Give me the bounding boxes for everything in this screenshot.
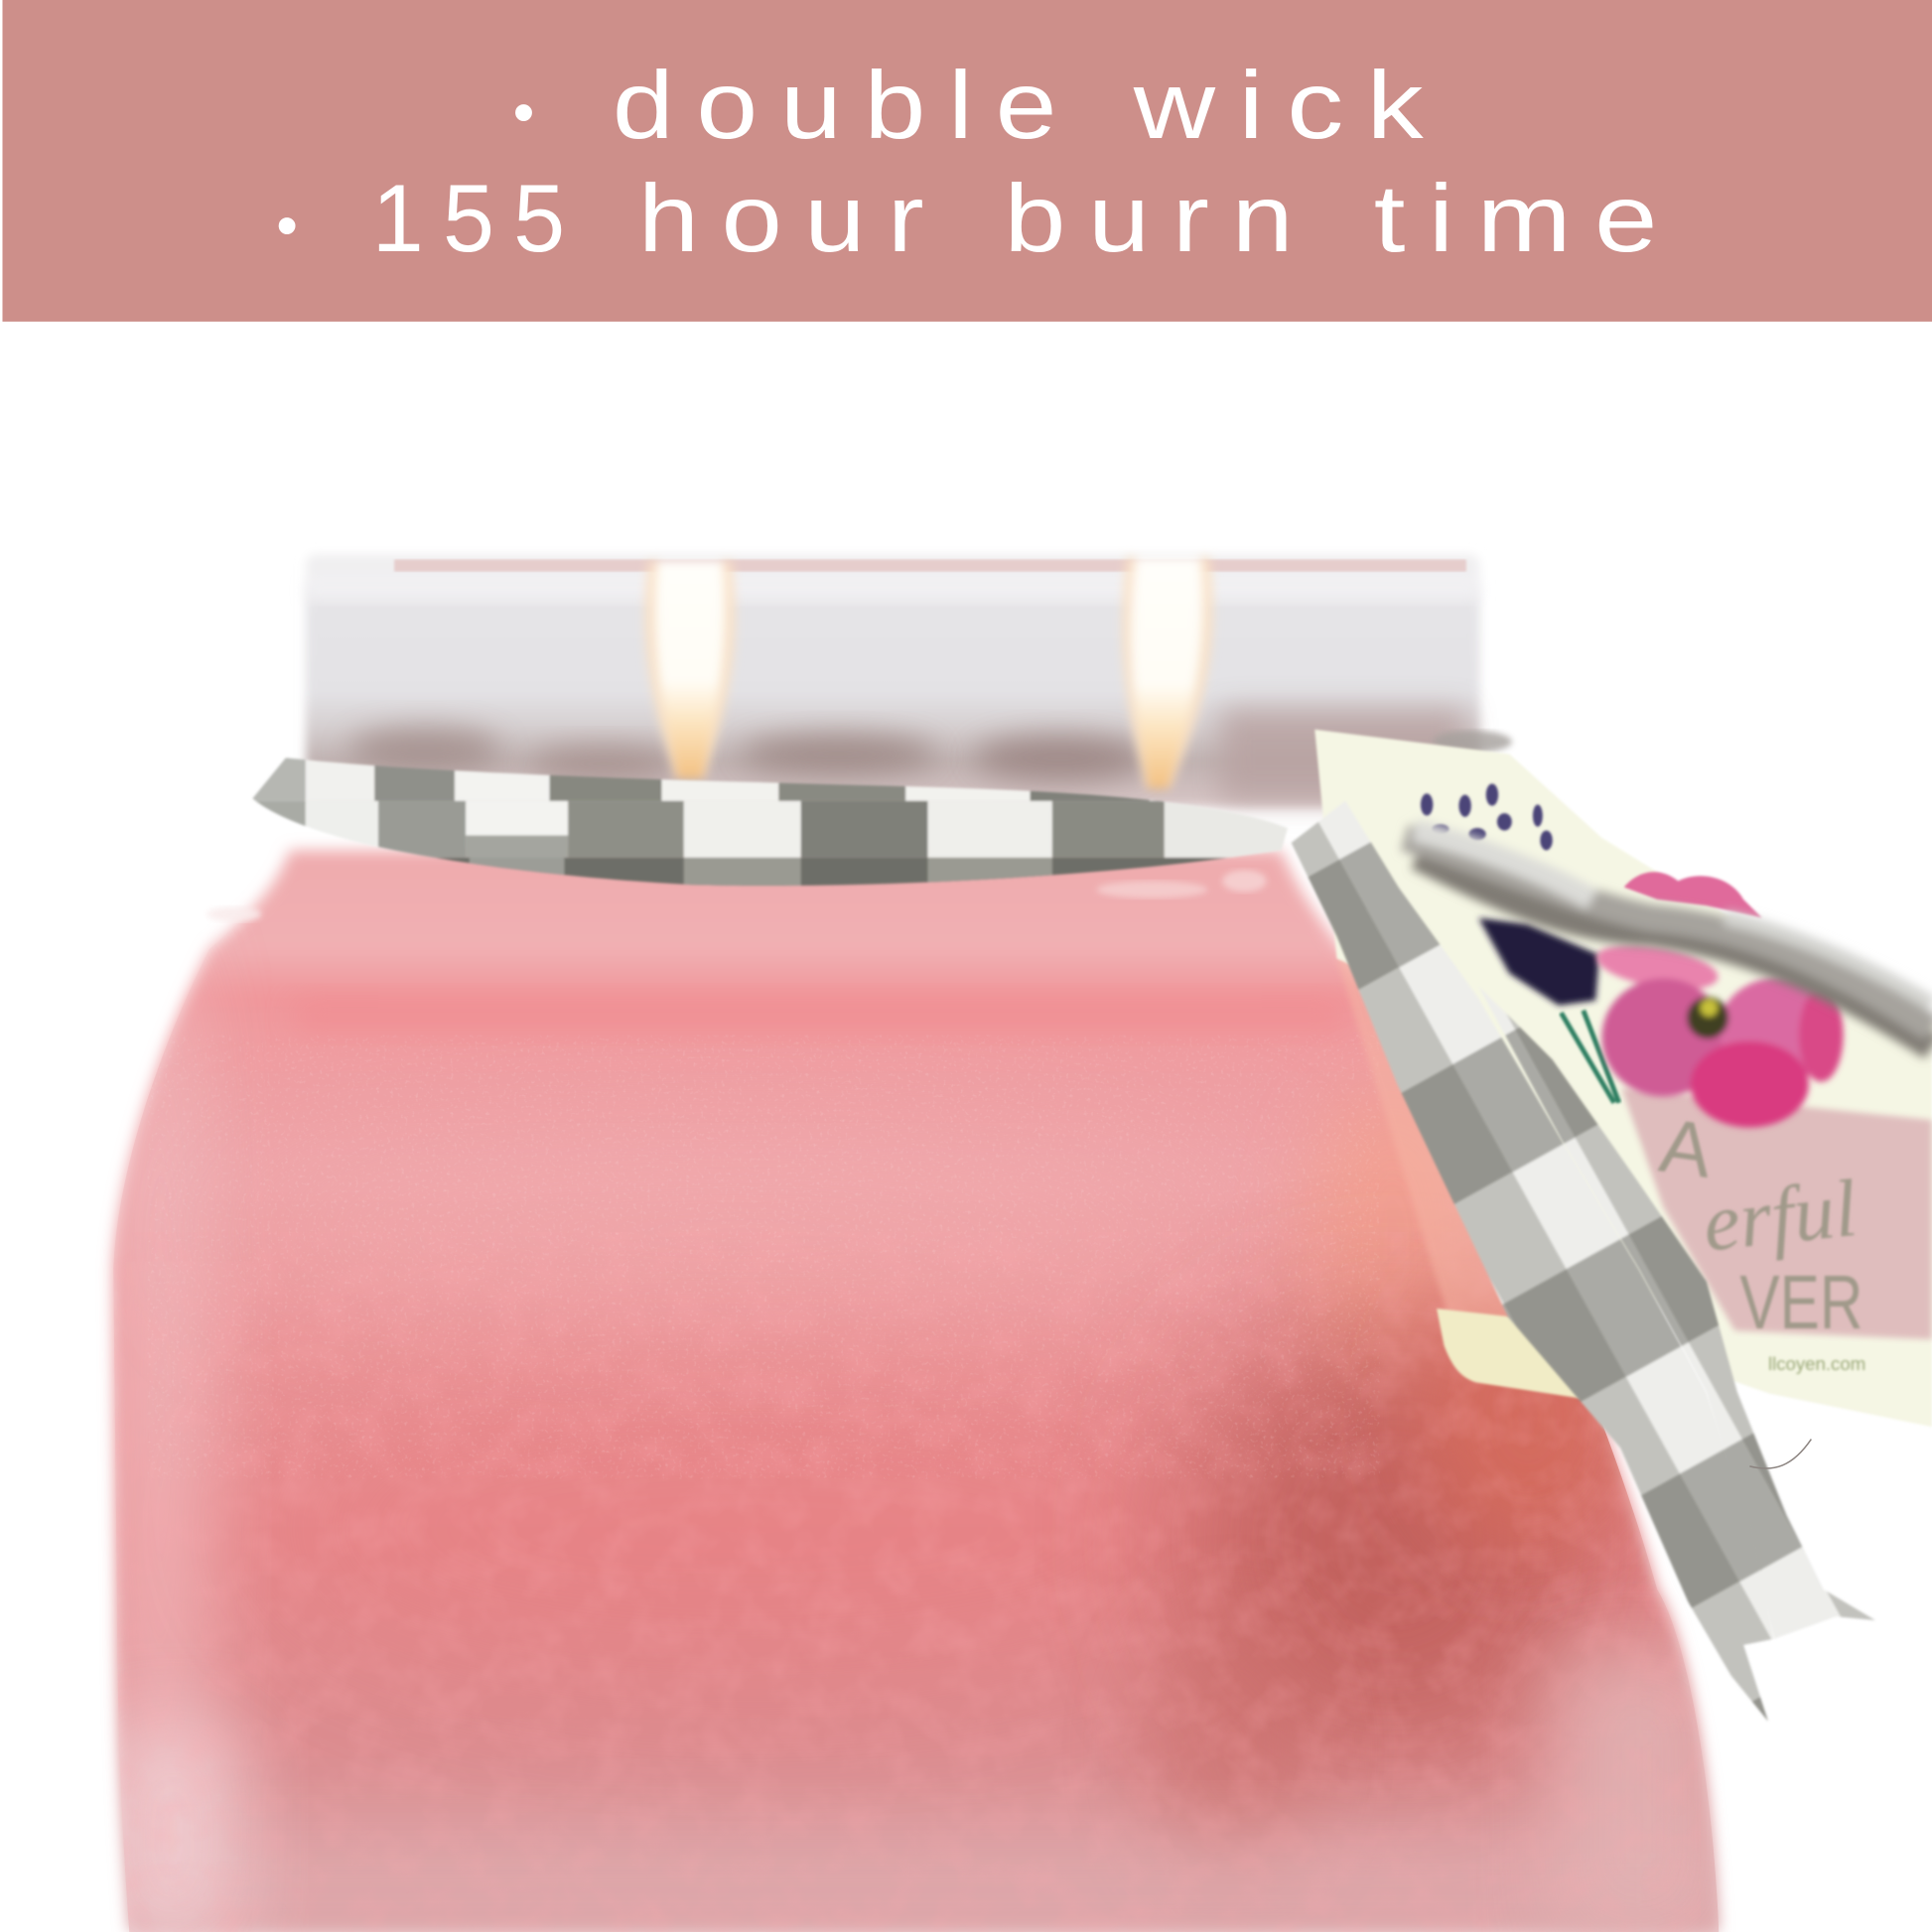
flame: right wick bbox=[1122, 557, 1213, 788]
word: time: time bbox=[1374, 164, 1681, 272]
ribbon: upper right end bbox=[1405, 830, 1932, 1047]
feature: double wick: double bbox=[613, 51, 1079, 159]
word: burn: burn bbox=[1004, 164, 1315, 272]
feature: burn time bbox=[372, 164, 1681, 272]
flower stems bbox=[1561, 1011, 1619, 1103]
tag pink label bbox=[1621, 1088, 1932, 1339]
word: hour: hour bbox=[638, 164, 946, 272]
poppy flower bbox=[1593, 937, 1844, 1128]
glass rim bbox=[306, 554, 1512, 807]
clear tag sleeve bbox=[1337, 936, 1601, 1380]
lavender cluster bbox=[1478, 918, 1599, 1006]
tag wording bbox=[1655, 1103, 1865, 1374]
flower top petal bbox=[1624, 872, 1762, 918]
feature: double wick bbox=[613, 51, 1447, 159]
tag cream card bbox=[1314, 730, 1932, 1427]
bullet: double wick: • bbox=[513, 78, 534, 147]
tag wording: llcoyen.com bbox=[1768, 1353, 1865, 1374]
candle jar photo bbox=[98, 554, 1932, 1932]
ribbon: front tail bbox=[1292, 801, 1774, 1722]
tag bottom corner bbox=[1437, 1309, 1589, 1400]
tag wording: VER bbox=[1739, 1260, 1863, 1345]
loose thread bbox=[1749, 1440, 1811, 1468]
ribbon lower row bbox=[436, 856, 1227, 888]
ribbon middle row bbox=[246, 801, 1300, 858]
word: wick: wick bbox=[1133, 51, 1447, 159]
wax body bbox=[98, 850, 1737, 1932]
tag wording: A bbox=[1655, 1103, 1718, 1194]
banner bbox=[2, 0, 1932, 322]
ribbon: back tail bbox=[1478, 986, 1875, 1639]
feature: burn time: 155 bbox=[372, 164, 584, 272]
tag wording: erful bbox=[1699, 1163, 1862, 1269]
ribbon upper row bbox=[252, 757, 1154, 802]
hang tag bbox=[1314, 730, 1932, 1427]
lavender sprigs bbox=[1421, 783, 1553, 850]
bullet: burn time: • bbox=[276, 192, 298, 260]
flame: left wick bbox=[644, 561, 736, 778]
gingham ribbon band bbox=[252, 757, 1288, 888]
banner panel bbox=[2, 0, 1932, 322]
